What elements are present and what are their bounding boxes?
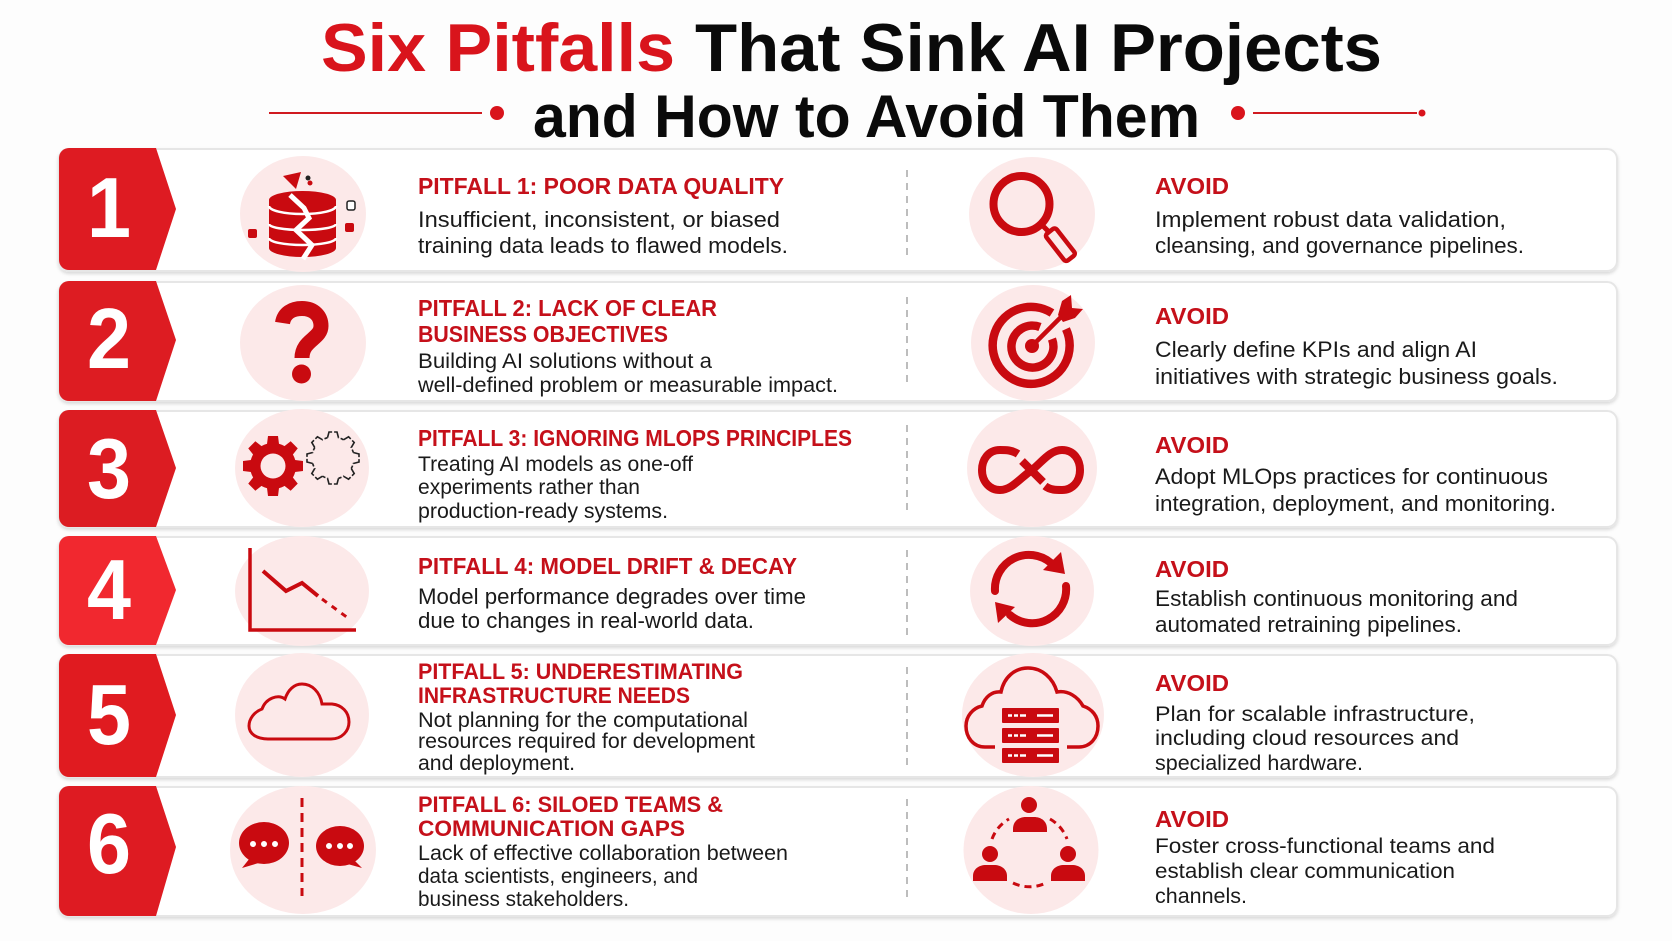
pitfall 2 text: well-defined problem or measurable impact. bbox=[417, 374, 838, 397]
pitfall 6 text: PITFALL 6: SILOED TEAMS & bbox=[418, 792, 723, 817]
avoid 1 text: Implement robust data validation, bbox=[1155, 207, 1506, 232]
avoid 6 text bbox=[1155, 806, 1495, 908]
number badge 5 bbox=[59, 654, 176, 777]
pitfall 5 text: PITFALL 5: UNDERESTIMATING bbox=[418, 659, 743, 684]
panel: row 1 poor data quality bbox=[59, 148, 1617, 272]
avoid 3 text: AVOID bbox=[1155, 432, 1229, 458]
pitfall 5 text: INFRASTRUCTURE NEEDS bbox=[418, 683, 690, 708]
avoid 1 text: AVOID bbox=[1155, 173, 1229, 199]
avoid 2 text: initiatives with strategic business goals. bbox=[1155, 364, 1558, 389]
number badge 1: 1 bbox=[87, 161, 131, 256]
pitfall 4 text: due to changes in real-world data. bbox=[418, 608, 754, 633]
avoid 6 text: AVOID bbox=[1155, 806, 1229, 832]
pitfall 2 text: BUSINESS OBJECTIVES bbox=[418, 321, 668, 347]
panel: row 4 model drift bbox=[59, 536, 1617, 646]
pitfall 3 text: PITFALL 3: IGNORING MLOPS PRINCIPLES bbox=[418, 425, 852, 451]
panel: row 3 ignoring MLOps bbox=[59, 409, 1617, 527]
avoid 6 text: Foster cross-functional teams and bbox=[1155, 835, 1495, 858]
number badge 4 bbox=[59, 536, 176, 645]
pitfall 5 text: resources required for development bbox=[418, 730, 755, 753]
avoid 4 text bbox=[1155, 556, 1518, 637]
avoid 3 text: Adopt MLOps practices for continuous bbox=[1155, 464, 1548, 489]
panel: row 2 lack of objectives bbox=[59, 281, 1617, 401]
number badge 6: 6 bbox=[87, 797, 131, 892]
pitfall 2 text: PITFALL 2: LACK OF CLEAR bbox=[418, 295, 717, 321]
avoid 5 text: specialized hardware. bbox=[1155, 752, 1363, 775]
pitfall 2 text: Building AI solutions without a bbox=[418, 350, 712, 373]
title: and How to Avoid Them bbox=[533, 83, 1200, 150]
avoid 1 text bbox=[1155, 173, 1524, 258]
pitfall 4 text: Model performance degrades over time bbox=[418, 584, 806, 609]
avoid 4 text: Establish continuous monitoring and bbox=[1155, 586, 1518, 611]
number badge 2 bbox=[59, 281, 176, 401]
pitfall 1 text: training data leads to flawed models. bbox=[418, 233, 788, 258]
title: Six Pitfalls bbox=[321, 10, 675, 86]
icon: dashed outline gear bbox=[307, 432, 359, 484]
icon: declining chart bbox=[235, 536, 369, 646]
avoid 4 text: AVOID bbox=[1155, 556, 1229, 582]
avoid 3 text bbox=[1155, 432, 1556, 516]
number badge 3: 3 bbox=[87, 422, 131, 517]
icon: cracked database bbox=[240, 156, 366, 272]
pitfall 6 text: business stakeholders. bbox=[418, 888, 629, 911]
avoid 2 text: AVOID bbox=[1155, 303, 1229, 329]
avoid 4 text: automated retraining pipelines. bbox=[1155, 612, 1462, 637]
icon: sync arrows bbox=[970, 536, 1094, 646]
pitfall 1 text: PITFALL 1: POOR DATA QUALITY bbox=[418, 173, 784, 199]
number badge 3 bbox=[59, 410, 176, 527]
number badge 2: 2 bbox=[87, 292, 131, 387]
number badge 6 bbox=[59, 786, 176, 916]
pitfall 6 text: data scientists, engineers, and bbox=[418, 865, 698, 888]
title ornament: right bbox=[1231, 106, 1426, 120]
pitfall 5 text bbox=[418, 659, 755, 775]
title bbox=[321, 10, 1382, 150]
pitfall 1 text: Insufficient, inconsistent, or biased bbox=[418, 207, 780, 232]
avoid 6 text: establish clear communication bbox=[1155, 860, 1455, 883]
icon: connected team bbox=[964, 786, 1098, 914]
number badge 4: 4 bbox=[87, 543, 131, 638]
pitfall 5 text: Not planning for the computational bbox=[418, 709, 748, 732]
icon: cloud server bbox=[962, 653, 1104, 777]
pitfall 3 text: production-ready systems. bbox=[418, 500, 668, 523]
icon: target with arrow bbox=[971, 285, 1095, 401]
icon: question mark bbox=[240, 285, 366, 401]
pitfall 1 text bbox=[418, 173, 788, 258]
pitfall 4 text: PITFALL 4: MODEL DRIFT & DECAY bbox=[418, 553, 797, 579]
icon: cloud outline bbox=[235, 653, 369, 777]
pitfall 3 text: experiments rather than bbox=[418, 476, 640, 499]
avoid 6 text: channels. bbox=[1155, 885, 1247, 908]
number badge 5: 5 bbox=[87, 668, 131, 763]
icon: infinity loop bbox=[967, 409, 1097, 527]
pitfall 4 text bbox=[418, 553, 806, 633]
avoid 2 text bbox=[1155, 303, 1558, 389]
icon: gears bbox=[235, 409, 369, 527]
icon: magnifying glass bbox=[969, 157, 1095, 271]
avoid 5 text bbox=[1155, 670, 1475, 775]
avoid 3 text: integration, deployment, and monitoring. bbox=[1155, 491, 1556, 516]
avoid 5 text: including cloud resources and bbox=[1155, 727, 1459, 750]
avoid 1 text: cleansing, and governance pipelines. bbox=[1155, 233, 1524, 258]
pitfall 2 text bbox=[417, 295, 838, 397]
pitfall 6 text: Lack of effective collaboration between bbox=[418, 842, 788, 865]
avoid 2 text: Clearly define KPIs and align AI bbox=[1155, 337, 1477, 362]
icon: solid gear bbox=[243, 436, 303, 496]
panel: row 6 siloed teams bbox=[59, 786, 1617, 916]
pitfall 6 text: COMMUNICATION GAPS bbox=[418, 816, 685, 841]
icon: separated chat bubbles bbox=[230, 786, 376, 914]
pitfall 6 text bbox=[418, 792, 788, 911]
panel: row 5 infrastructure bbox=[59, 653, 1617, 777]
avoid 5 text: Plan for scalable infrastructure, bbox=[1155, 703, 1475, 726]
title ornament: left bbox=[269, 106, 504, 120]
pitfall 5 text: and deployment. bbox=[418, 752, 575, 775]
avoid 5 text: AVOID bbox=[1155, 670, 1229, 696]
title: That Sink AI Projects bbox=[695, 10, 1382, 86]
pitfall 3 text bbox=[418, 425, 852, 523]
number badge 1 bbox=[59, 148, 176, 270]
pitfall 3 text: Treating AI models as one-off bbox=[418, 453, 693, 476]
